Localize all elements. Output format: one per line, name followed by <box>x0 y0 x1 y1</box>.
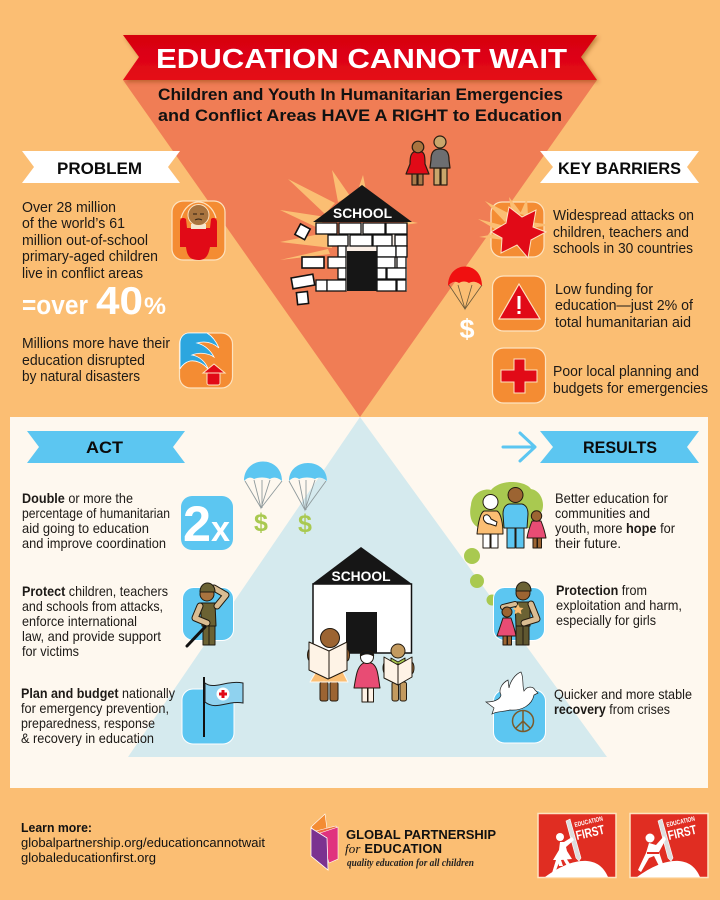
text: protect: enforce international <box>22 614 137 629</box>
text: double: and improve coordination <box>22 536 166 551</box>
logo: Global Partnership for Education: GLOBAL PARTNERSHIP <box>346 827 496 842</box>
text: problem statistic: live in conflict areas <box>22 266 143 282</box>
icon: blue parachutes with dollars <box>244 462 327 538</box>
stat: over 40 percent: =over <box>22 290 88 320</box>
text: protection: Protection from <box>556 583 647 598</box>
text: learn more: Learn more: <box>21 820 92 835</box>
text: natural disasters: Millions more have their <box>22 336 170 352</box>
icon: blue parachutes with dollars: $ <box>254 509 268 537</box>
text: better education: Better education for <box>555 491 668 506</box>
text: problem statistic: of the world’s 61 <box>22 216 125 232</box>
child left with book <box>308 628 350 701</box>
text: better education <box>555 491 675 551</box>
child centre in pink <box>354 650 380 702</box>
ribbon: problem: PROBLEM <box>57 160 142 178</box>
text: problem statistic: primary-aged children <box>22 249 158 265</box>
text: plan and budget: for emergency prevention, <box>21 701 169 716</box>
arrow <box>503 433 535 461</box>
wall backing <box>346 223 407 291</box>
orange inverted triangle <box>123 80 597 417</box>
icon: couple <box>406 136 450 185</box>
text: learn more: globaleducationfirst.org <box>21 850 156 865</box>
text: poor planning: budgets for emergencies <box>553 381 708 397</box>
text: protect: Protect children, teachers <box>22 584 168 599</box>
text: protection: especially for girls <box>556 613 656 628</box>
icon: flood wave and house <box>180 333 232 388</box>
green thought dots <box>464 548 498 606</box>
child right with book <box>383 644 414 701</box>
text: recovery: Quicker and more stable <box>554 687 692 702</box>
panel: lower action area <box>10 417 708 788</box>
logo: Education First boy <box>630 814 708 878</box>
text: protection <box>556 583 682 628</box>
text: plan and budget: Plan and budget nationally <box>21 686 175 701</box>
text: poor planning <box>553 364 708 397</box>
icon: child with hands on head <box>172 201 225 260</box>
text: plan and budget: preparedness, response <box>21 716 155 731</box>
ribbon: problem <box>22 151 180 183</box>
ribbon: results <box>540 431 699 463</box>
text: low funding <box>555 282 694 331</box>
text: protect: for victims <box>22 644 79 659</box>
text: attacks <box>553 208 694 257</box>
ribbon: act: ACT <box>86 439 123 457</box>
text: low funding: total humanitarian aid <box>555 315 691 331</box>
icon: family in thought cloud <box>470 482 546 548</box>
icon: flag with cross <box>182 677 243 744</box>
illustration: rebuilt school with children <box>308 547 414 702</box>
light blue triangle <box>128 417 607 757</box>
subtitle: and Conflict Areas HAVE A RIGHT to Education <box>158 106 562 125</box>
text: protect: law, and provide support <box>22 629 161 644</box>
icon: soldier protecting child <box>494 582 544 645</box>
logo: Education First boy: EDUCATION <box>666 816 696 829</box>
text: problem statistic: million out-of-school <box>22 233 148 249</box>
text: plan and budget: & recovery in education <box>21 731 154 746</box>
subtitle: Children and Youth In Humanitarian Emergencies <box>158 85 563 104</box>
text: learn more <box>21 820 265 865</box>
text: recovery: recovery from crises <box>554 702 670 717</box>
icon: 2x: 2 <box>183 496 211 552</box>
logo: Global Partnership for Education: quality education for all children <box>347 858 474 869</box>
text: protection: exploitation and harm, <box>556 598 682 613</box>
roof <box>313 185 412 222</box>
icon: blue parachutes with dollars: $ <box>298 510 312 538</box>
text: double: percentage of humanitarian <box>22 506 170 521</box>
explosion rays <box>280 170 418 260</box>
stat: over 40 percent: 40 <box>96 280 143 323</box>
logo: Global Partnership for Education <box>311 814 496 870</box>
icon: red parachute with dollar: $ <box>459 314 475 344</box>
text: better education: communities and <box>555 506 650 521</box>
subtitle <box>158 85 563 125</box>
text: low funding: Low funding for <box>555 282 653 298</box>
text: better education: their future. <box>555 536 621 551</box>
logo: Education First girl: EDUCATION <box>574 816 604 829</box>
text: attacks: children, teachers and <box>553 225 689 241</box>
illustration: rebuilt school with children: SCHOOL <box>332 568 391 584</box>
ribbon: key barriers: KEY BARRIERS <box>558 160 681 178</box>
logo: Education First boy: FIRST <box>666 822 698 843</box>
logo: Global Partnership for Education: for EDUCATION <box>345 841 442 856</box>
ribbon: act <box>27 431 185 463</box>
icon: warning triangle <box>492 276 546 331</box>
text: natural disasters: education disrupted <box>22 353 145 369</box>
text: learn more: globalpartnership.org/educationcannotwait <box>21 835 265 850</box>
title banner <box>123 35 597 80</box>
icon: red parachute with dollar <box>448 266 482 344</box>
icon: 2x: x <box>211 508 230 549</box>
ribbon: results: RESULTS <box>583 439 657 457</box>
text: attacks: schools in 30 countries <box>553 241 693 257</box>
icon: saluting soldier <box>182 583 234 646</box>
loose bricks <box>291 224 324 305</box>
text: better education: youth, more hope for <box>555 521 675 536</box>
illustration: damaged school: SCHOOL <box>333 205 392 221</box>
text: double: aid going to education <box>22 521 149 536</box>
icon: attacks starburst <box>478 197 553 258</box>
logo: Education First girl: FIRST <box>574 822 606 843</box>
text: low funding: education—just 2% of <box>555 298 694 314</box>
text: natural disasters <box>22 336 170 385</box>
text: attacks: Widespread attacks on <box>553 208 694 224</box>
title banner: EDUCATION CANNOT WAIT <box>156 43 567 74</box>
text: double <box>22 491 170 551</box>
door <box>347 251 377 291</box>
stat: over 40 percent <box>22 280 166 323</box>
illustration: damaged school <box>280 170 418 305</box>
logo: Education First girl <box>538 814 616 878</box>
text: problem statistic: Over 28 million <box>22 200 116 216</box>
text: problem statistic <box>22 200 158 282</box>
text: plan and budget <box>21 686 175 746</box>
text: recovery <box>554 687 692 717</box>
stat: over 40 percent: % <box>144 293 166 320</box>
icon: medical cross <box>492 348 546 403</box>
text: poor planning: Poor local planning and <box>553 364 699 380</box>
bricks <box>316 223 407 291</box>
text: natural disasters: by natural disasters <box>22 369 140 385</box>
text: double: Double or more the <box>22 491 133 506</box>
icon: 2x <box>181 496 233 552</box>
text: protect <box>22 584 168 659</box>
icon: dove and peace sign <box>486 672 546 743</box>
ribbon: key barriers <box>540 151 699 183</box>
text: protect: and schools from attacks, <box>22 599 163 614</box>
